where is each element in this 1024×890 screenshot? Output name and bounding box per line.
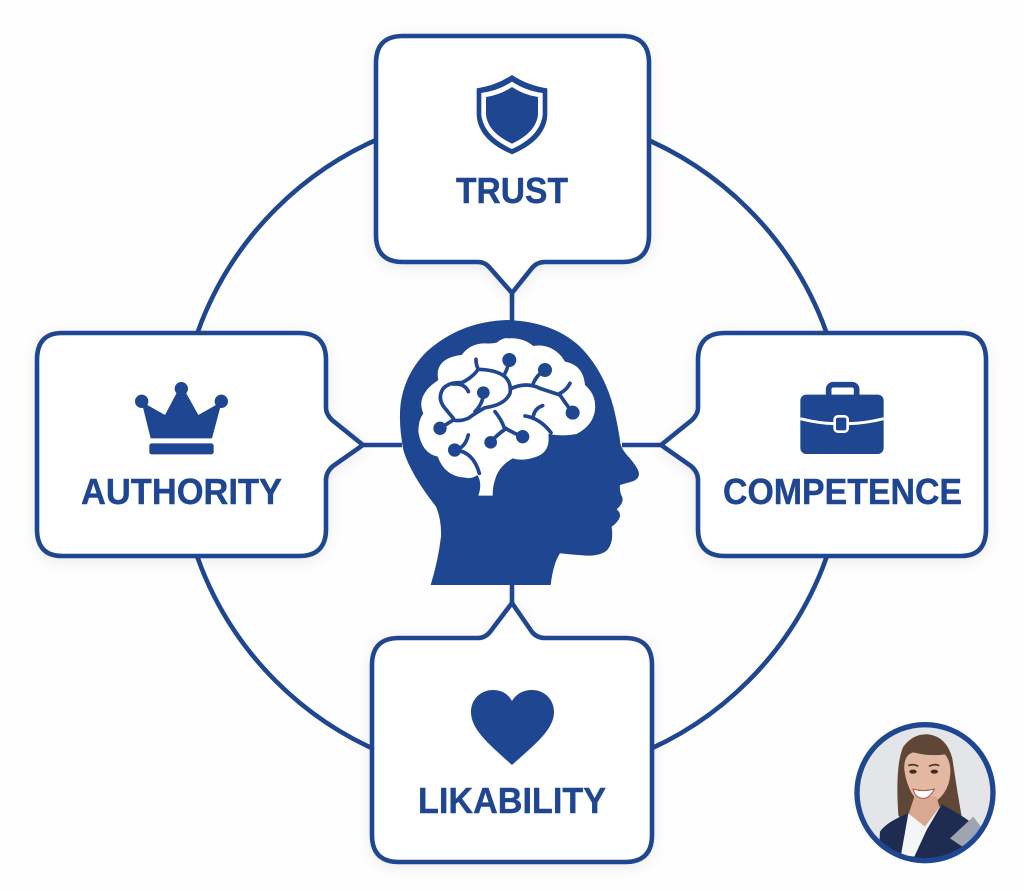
icon: crown xyxy=(135,382,228,454)
icon: shield xyxy=(477,75,547,154)
icon: head with brain xyxy=(400,320,639,585)
heading: likability: LIKABILITY xyxy=(418,780,606,821)
heading: competence: COMPETENCE xyxy=(723,471,962,512)
portrait: woman in navy suit xyxy=(857,725,993,862)
brain xyxy=(418,338,595,496)
panel: likability xyxy=(372,584,652,862)
heading: trust: TRUST xyxy=(456,170,568,211)
icon: heart xyxy=(471,690,554,765)
icon: briefcase xyxy=(800,385,884,454)
heading: authority: AUTHORITY xyxy=(81,471,282,512)
panel: authority xyxy=(37,333,402,556)
panel: competence xyxy=(622,333,986,556)
panel: trust xyxy=(376,36,649,322)
